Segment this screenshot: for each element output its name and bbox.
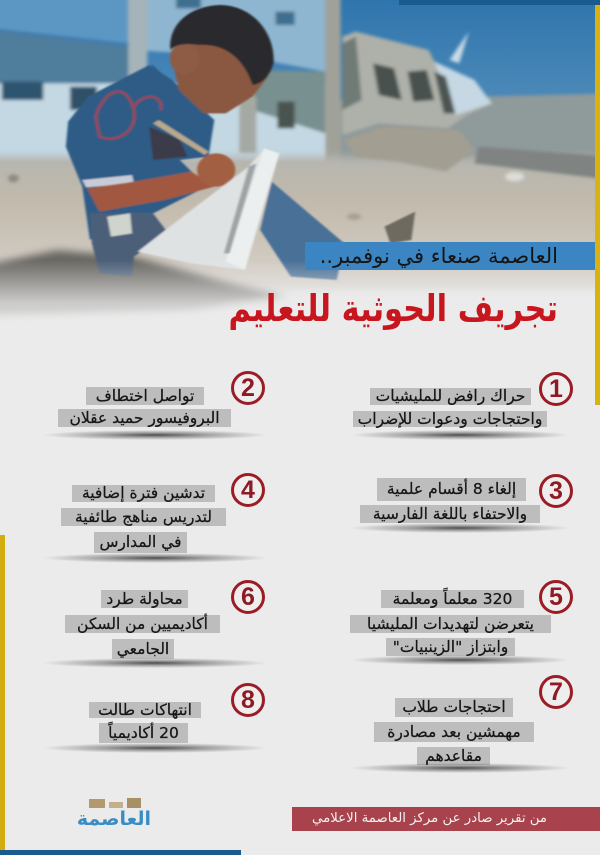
shadow [42, 553, 268, 563]
shadow [42, 430, 268, 440]
text line: تواصل اختطاف [96, 387, 194, 405]
shadow [350, 523, 570, 533]
source bar: من تقرير صادر عن مركز العاصمة الاعلامي [312, 811, 547, 826]
shadow [42, 658, 268, 668]
number 8 [231, 683, 265, 717]
item 3 [357, 474, 573, 532]
text line: 20 أكاديمياً [108, 724, 179, 742]
number 7 [539, 675, 573, 709]
text line: احتجاجات طلاب [402, 698, 506, 716]
number 1: 1 [549, 375, 563, 403]
bottom blue bar [0, 850, 241, 855]
item 4 [49, 473, 265, 562]
number 5: 5 [549, 583, 563, 611]
shadow [350, 655, 570, 665]
subtitle banner: العاصمة صنعاء في نوفمبر.. [320, 244, 558, 268]
number 3 [539, 474, 573, 508]
text line: البروفيسور حميد عقلان [69, 409, 220, 427]
number 6: 6 [241, 583, 255, 611]
text line: تدشين فترة إضافية [82, 484, 205, 502]
text line: محاولة طرد [106, 590, 183, 608]
number 5 [539, 580, 573, 614]
text line: إلغاء 8 أقسام علمية [387, 480, 516, 498]
number 3: 3 [549, 477, 563, 505]
text line: لتدريس مناهج طائفية [75, 508, 212, 526]
item 5 [350, 580, 573, 664]
number 6 [231, 580, 265, 614]
boy [66, 5, 415, 280]
text line: حراك رافض للمليشيات [376, 387, 525, 405]
text line: واحتجاجات ودعوات للإضراب [358, 410, 542, 428]
text line: الجامعي [117, 640, 169, 658]
number 8: 8 [241, 686, 255, 714]
left yellow bar [0, 535, 5, 850]
shadow [350, 430, 570, 440]
shadow [350, 763, 570, 773]
text line: مهمشين بعد مصادرة [387, 723, 521, 741]
item 6 [49, 580, 265, 668]
text line: وابتزاز "الزينبيات" [393, 638, 508, 656]
item 1 [353, 372, 573, 440]
number 4 [231, 473, 265, 507]
source bar [292, 807, 600, 831]
logo buildings icon [89, 798, 141, 808]
title: تجريف الحوثية للتعليم [229, 287, 558, 330]
text line: في المدارس [99, 533, 182, 551]
top blue bar [399, 0, 600, 5]
text line: مقاعدهم [425, 747, 482, 765]
text line: والاحتفاء باللغة الفارسية [373, 505, 527, 523]
item 2 [49, 371, 265, 440]
item 7 [357, 675, 573, 772]
number 2: 2 [241, 374, 255, 402]
text line: انتهاكات طالت [98, 701, 192, 719]
logo wordmark: العاصمة [77, 808, 151, 830]
text line [377, 478, 526, 501]
right yellow bar [595, 5, 600, 405]
logo [77, 798, 151, 830]
number 1 [539, 372, 573, 406]
number 2 [231, 371, 265, 405]
text line: أكاديميين من السكن [77, 615, 208, 633]
rock under the boy [0, 250, 287, 317]
text line: 320 معلماً ومعلمة [393, 590, 512, 608]
shadow [42, 743, 268, 753]
text line: يتعرضن لتهديدات المليشيا [367, 615, 534, 633]
number 7: 7 [549, 678, 563, 706]
hero photo: boy writing before a destroyed school [0, 0, 595, 317]
item 8 [49, 683, 265, 752]
number 4: 4 [241, 476, 255, 504]
